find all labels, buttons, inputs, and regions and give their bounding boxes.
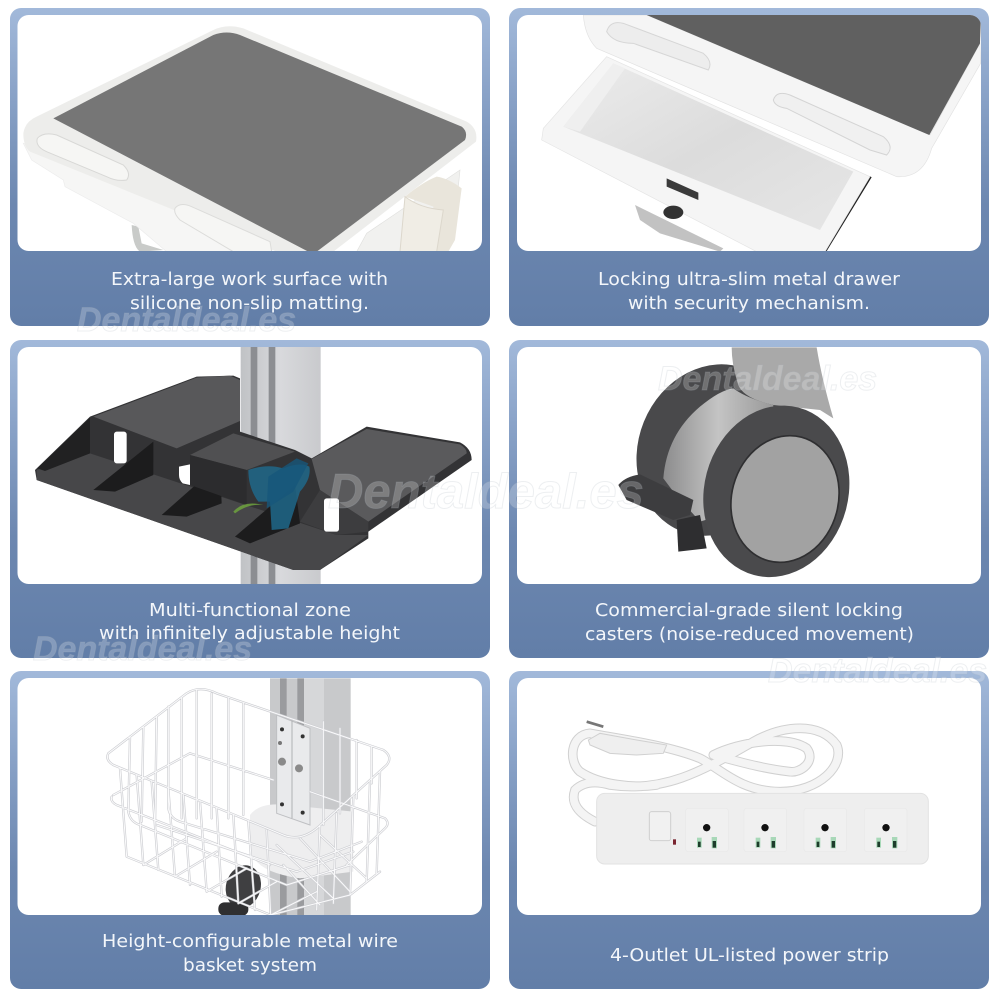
watermarks: Dentaldeal.es (768, 652, 987, 690)
outlet 1 (697, 824, 717, 848)
caption: drawer (598, 269, 901, 314)
caption: wire basket: Height-configurable metal wire (102, 931, 398, 952)
caption: wire basket (102, 931, 398, 976)
outlet 4 (876, 824, 898, 848)
clamp knob (218, 865, 261, 915)
illustration: pole and dark shelf (35, 345, 472, 588)
watermarks: Dentaldeal.es (328, 465, 644, 519)
illustration: open drawer below tray (542, 15, 981, 252)
watermarks: Dentaldeal.es (658, 360, 877, 398)
watermarks (33, 301, 987, 690)
panel: wire basket (10, 671, 490, 989)
caption: drawer: Locking ultra-slim metal drawer (598, 269, 901, 290)
wire mesh (107, 689, 389, 915)
logo mark: watermark tooth (233, 458, 310, 530)
illustration: wire basket on pole (107, 678, 389, 917)
panel: power strip (509, 671, 989, 989)
illustration: locking caster wheel (618, 347, 850, 578)
caption: multi-functional zone (99, 600, 400, 644)
watermarks: Dentaldeal.es (77, 301, 296, 339)
caption: multi-functional zone: with infinitely adjustable height (99, 623, 400, 644)
watermarks: Dentaldeal.es (33, 630, 252, 668)
outlet 3 (816, 824, 836, 848)
mounting bracket (277, 715, 310, 825)
caption: work surface: silicone non-slip matting. (130, 293, 369, 314)
power cord (573, 728, 838, 822)
outlet 2 (756, 824, 776, 848)
switch (649, 812, 676, 845)
caption: casters: casters (noise-reduced movement) (585, 624, 914, 645)
panel: casters (509, 340, 989, 658)
caption: multi-functional zone: Multi-functional zone (149, 600, 351, 621)
caption: casters: Commercial-grade silent locking (595, 600, 903, 621)
brake pedal (618, 474, 707, 552)
illustration: power strip with cord (573, 722, 928, 864)
caption: power strip: 4-Outlet UL-listed power strip (610, 945, 889, 966)
panel: drawer (509, 8, 989, 326)
caption: casters (585, 600, 914, 645)
illustration: tray top with grey mat (23, 26, 476, 252)
caption: wire basket: basket system (183, 955, 317, 976)
icon: cream holder (400, 177, 462, 252)
caption: work surface (111, 269, 388, 314)
caption: work surface: Extra-large work surface with (111, 269, 388, 290)
panel: work surface (10, 8, 490, 326)
caption: drawer: with security mechanism. (628, 293, 870, 314)
plug (587, 722, 667, 755)
panel: multi-functional zone (10, 340, 490, 658)
